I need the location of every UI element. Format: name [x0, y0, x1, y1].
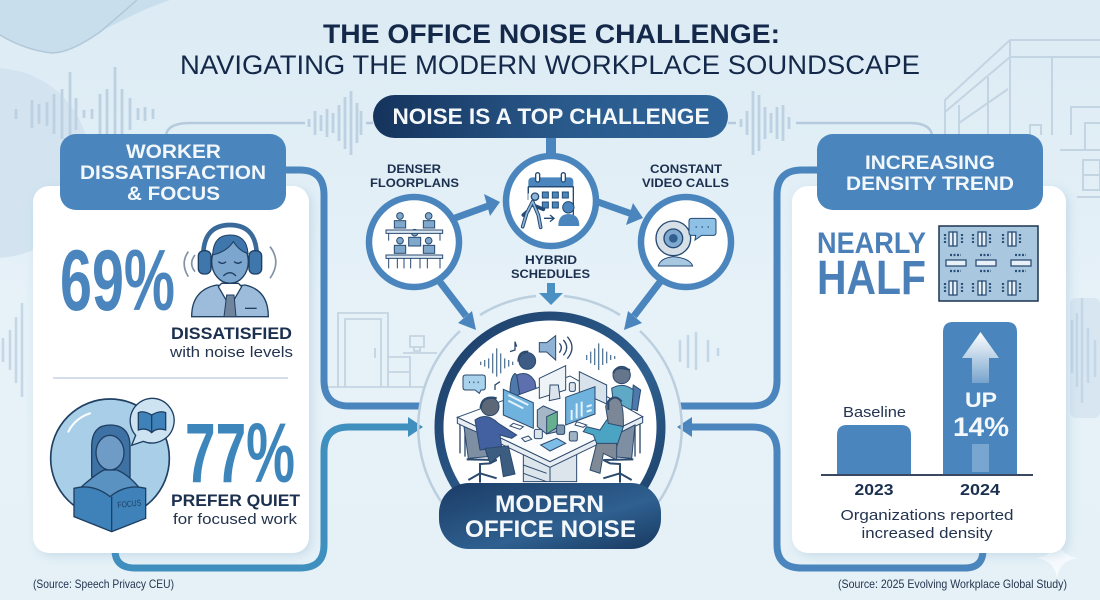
- axis label: 2023: 2023: [854, 482, 894, 499]
- ring: [439, 316, 661, 538]
- arrow: floorplans to office: [440, 282, 476, 330]
- bar: 2023 baseline: [837, 405, 911, 474]
- outer ring around office scene: [418, 296, 682, 507]
- label: prefer quiet: for focused work: [173, 512, 298, 528]
- connector: left panel to centre: [280, 170, 420, 406]
- driver: constant video calls: [641, 164, 731, 287]
- label pill: [439, 483, 661, 549]
- label pill: OFFICE NOISE: [465, 516, 636, 543]
- icon: dense floorplan: [939, 226, 1038, 301]
- icon: webcam and chat: [641, 197, 731, 287]
- decorative office line art: [328, 313, 437, 387]
- panel: worker dissatisfaction: [33, 134, 309, 553]
- arrow: right panel to centre: [677, 417, 983, 568]
- icon: worker with headphones: [184, 225, 276, 317]
- label: prefer quiet: PREFER QUIET: [171, 491, 301, 510]
- panel heading: worker dissatisfaction: WORKER: [126, 142, 221, 163]
- chart caption: [840, 507, 1014, 542]
- panel heading: worker dissatisfaction: [60, 134, 286, 210]
- title: [180, 19, 920, 80]
- label: dissatisfied: with noise levels: [169, 345, 293, 361]
- statistic: nearly half: [817, 227, 926, 305]
- icon: woman reading focus book: [51, 398, 174, 532]
- label: prefer quiet: [171, 491, 301, 528]
- statistic: nearly half: NEARLY: [817, 227, 926, 260]
- bar chart: [821, 322, 1033, 499]
- chart caption: Organizations reported: [840, 507, 1014, 524]
- decorative top line links: [166, 123, 932, 135]
- bar: 2024 up 14%: 14%: [953, 412, 1009, 442]
- desk items: [522, 383, 577, 451]
- panel heading: worker dissatisfaction: DISSATISFACTION: [80, 163, 266, 184]
- icon: calendar and commuter: [506, 156, 596, 246]
- connector: right panel to centre: [680, 170, 820, 406]
- front workers: [464, 397, 635, 483]
- arrow: left quiet panel to centre: [115, 417, 423, 568]
- label pill: MODERN: [495, 491, 604, 518]
- arrow: hybrid down to office: [539, 283, 563, 305]
- back workers: [510, 352, 641, 411]
- panel heading: worker dissatisfaction: & FOCUS: [127, 184, 220, 205]
- bar: 2023 baseline: Baseline: [843, 405, 906, 421]
- chart caption: increased density: [862, 525, 993, 542]
- axis label: 2024: 2024: [960, 482, 1000, 499]
- label: [370, 164, 459, 190]
- label: CONSTANT: [650, 164, 722, 176]
- label: [642, 164, 729, 190]
- heading pill: noise is a top challenge: [373, 95, 728, 156]
- label: VIDEO CALLS: [642, 178, 729, 190]
- label: dissatisfied: DISSATISFIED: [171, 325, 292, 343]
- panel heading: increasing density: [817, 134, 1043, 210]
- arrow: video calls to office: [624, 282, 660, 330]
- label: [511, 255, 590, 281]
- driver: hybrid schedules: [506, 156, 596, 281]
- source: right: (Source: 2025 Evolving Workplace Global Study): [838, 577, 1067, 591]
- monitors: [503, 366, 607, 429]
- statistic: nearly half: HALF: [817, 252, 926, 305]
- decorative star: [1036, 538, 1078, 578]
- driver: denser floorplans: [369, 164, 459, 287]
- desktop: [457, 376, 643, 462]
- decorative waveforms: [16, 67, 789, 155]
- bar: 2024 up 14%: UP: [965, 389, 997, 412]
- icon: woman reading focus book: FOCUS: [117, 498, 142, 510]
- statistic: 69%: 69%: [60, 233, 175, 329]
- desk legs and drawers: [523, 450, 577, 482]
- arrow: floorplans to hybrid: [455, 194, 500, 218]
- illustration: team at shared desk: [457, 336, 643, 483]
- bar: 2024 up 14%: [943, 322, 1017, 474]
- label: dissatisfied: [169, 325, 293, 361]
- title: NAVIGATING THE MODERN WORKPLACE SOUNDSCAPE: [180, 50, 920, 80]
- icon: crowded desks: [369, 197, 459, 287]
- heading pill: noise is a top challenge: NOISE IS A TOP CHALLENGE: [392, 104, 710, 129]
- sound icons: [463, 336, 615, 393]
- panel: increasing density: [792, 134, 1066, 553]
- statistic: 77%: 77%: [185, 406, 295, 500]
- source: left: (Source: Speech Privacy CEU): [33, 577, 174, 591]
- label: SCHEDULES: [511, 269, 590, 281]
- label: HYBRID: [525, 255, 577, 267]
- arrow: hybrid to video calls: [598, 202, 643, 225]
- label: DENSER: [387, 164, 442, 176]
- label: FLOORPLANS: [370, 178, 459, 190]
- panel heading: increasing density: DENSITY TREND: [846, 174, 1014, 195]
- panel heading: increasing density: INCREASING: [865, 153, 995, 174]
- centerpiece: modern office noise: [439, 316, 661, 549]
- title: THE OFFICE NOISE CHALLENGE:: [323, 19, 780, 49]
